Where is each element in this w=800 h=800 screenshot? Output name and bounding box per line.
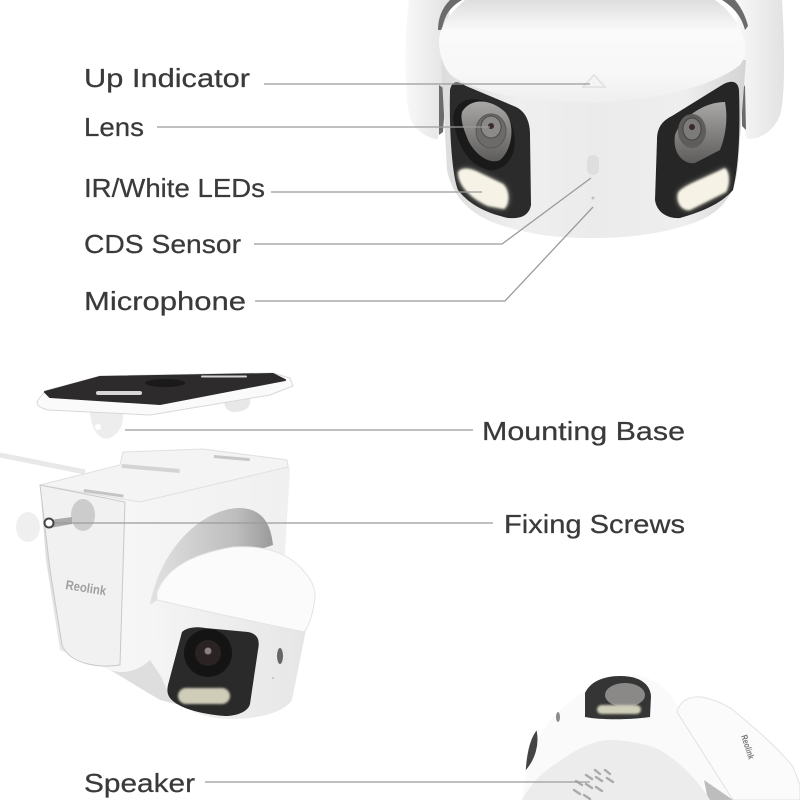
camera: bottom view <box>522 675 800 800</box>
label: Fixing Screws: Fixing Screws <box>504 509 685 539</box>
cable <box>0 455 85 472</box>
white plate <box>37 373 293 415</box>
speaker panel <box>522 740 710 800</box>
housing <box>585 676 651 719</box>
LED glow <box>678 168 729 210</box>
camera: front view <box>405 0 784 238</box>
dark gap <box>438 0 748 135</box>
screw cap <box>16 512 40 542</box>
lens housing <box>167 627 259 716</box>
slots <box>96 391 142 395</box>
lower body <box>441 60 746 238</box>
microphone hole <box>592 196 594 200</box>
right arm <box>735 0 784 139</box>
lower body <box>157 600 307 719</box>
lower joint <box>110 660 180 705</box>
left arm <box>405 0 450 139</box>
LED <box>458 169 508 209</box>
label: Microphone: Microphone <box>84 286 246 316</box>
arm logo: Reolink <box>739 734 757 761</box>
LED <box>678 168 729 210</box>
side lens <box>527 733 537 767</box>
arm shadow <box>704 780 733 800</box>
dome <box>157 547 315 632</box>
body <box>522 675 733 800</box>
label: Mounting Base: Mounting Base <box>482 416 685 446</box>
side sensor <box>556 712 560 722</box>
screw hole <box>71 499 95 531</box>
camera: side view <box>16 449 315 719</box>
label: Lens: Lens <box>84 112 144 142</box>
speaker slots <box>574 770 613 799</box>
top slots <box>84 489 124 498</box>
label: CDS Sensor: CDS Sensor <box>84 229 241 259</box>
sensor <box>277 648 283 664</box>
right lens housing <box>655 82 739 218</box>
right tab <box>224 398 250 412</box>
left lens housing <box>450 82 531 218</box>
logo: Reolink <box>65 577 108 598</box>
LED glow <box>458 169 508 209</box>
LED <box>178 688 230 704</box>
label: Up Indicator: Up Indicator <box>84 63 250 93</box>
fixing screw <box>44 517 72 528</box>
leader lines <box>55 84 593 782</box>
lens <box>184 629 232 677</box>
lens <box>678 114 706 148</box>
arm <box>677 697 800 800</box>
arch opening <box>150 508 273 605</box>
left tab <box>90 410 123 439</box>
lens <box>461 102 511 161</box>
black face <box>45 374 285 404</box>
top face <box>40 449 288 502</box>
label: Speaker: Speaker <box>84 768 195 798</box>
CDS sensor window <box>587 155 599 175</box>
LED <box>597 705 641 714</box>
mounting base <box>37 373 293 439</box>
label: IR/White LEDs: IR/White LEDs <box>84 173 265 203</box>
dome <box>439 0 745 102</box>
up indicator <box>583 75 605 87</box>
housing box <box>40 449 290 690</box>
back panel <box>40 485 125 666</box>
